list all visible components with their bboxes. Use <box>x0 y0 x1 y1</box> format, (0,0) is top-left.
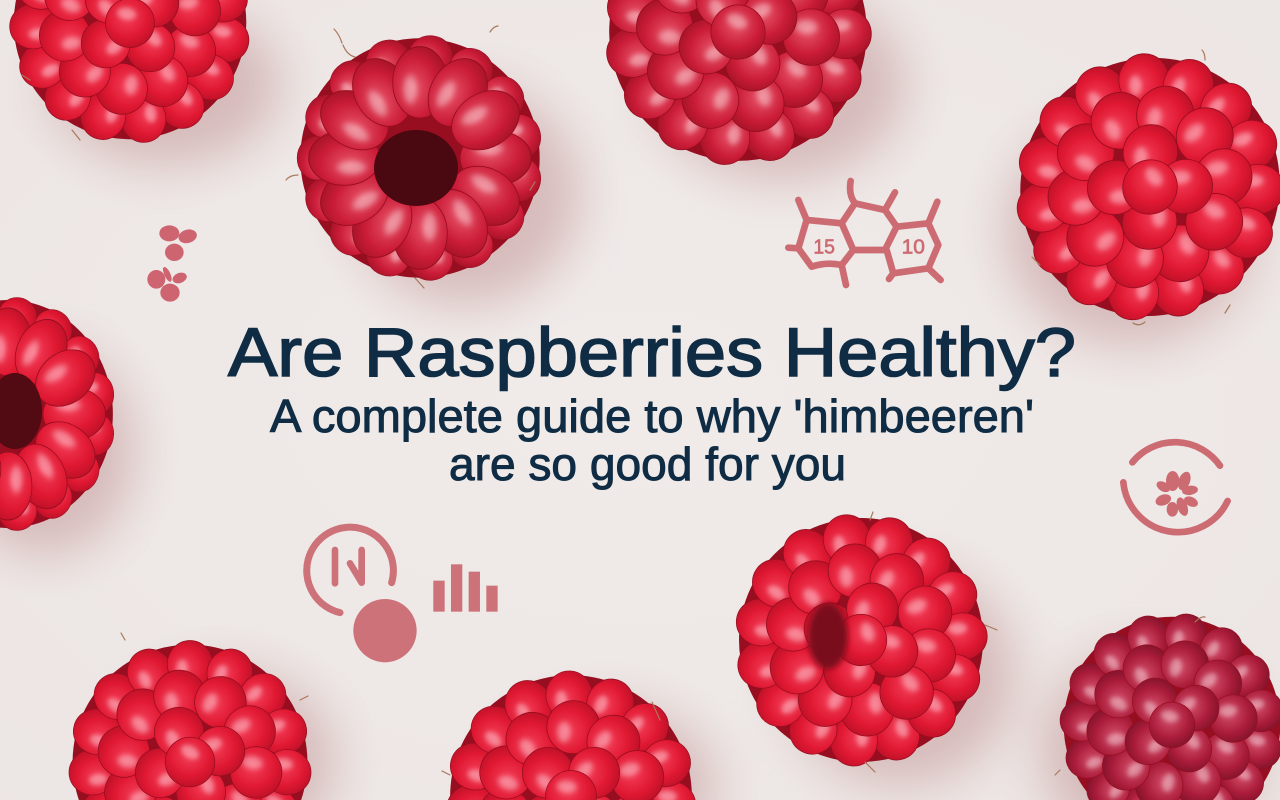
icon: molecule hexagons: 10 <box>902 235 925 258</box>
icon: circle with flower <box>1123 442 1228 532</box>
icon: molecule hexagons <box>788 181 941 285</box>
heading: Are Raspberries Healthy? <box>228 314 1076 391</box>
icon: berry clusters <box>147 225 198 302</box>
subtitle line 1: A complete guide to why 'himbeeren' <box>270 390 1034 442</box>
raspberry: right <box>958 0 1280 377</box>
hollow <box>0 373 42 449</box>
raspberry: bottom left <box>21 593 357 800</box>
icon: molecule hexagons: 15 <box>813 235 835 258</box>
title block <box>228 314 1076 490</box>
subtitle line 2: are so good for you <box>449 438 846 490</box>
raspberry: bottom centre <box>433 659 707 800</box>
raspberry: top middle <box>558 0 916 211</box>
raspberry: left edge with hollow <box>0 295 117 533</box>
icon: gauge with N and dot <box>307 527 417 662</box>
raspberry: bottom right, darker <box>1032 586 1280 800</box>
hollow <box>808 603 848 669</box>
raspberry: top left <box>0 0 270 164</box>
raspberry: top centre ring berry with dark hollow <box>297 34 545 282</box>
icon: bar chart <box>433 564 498 612</box>
hollow <box>374 130 458 206</box>
raspberry: lower right ring berry <box>697 476 1024 800</box>
